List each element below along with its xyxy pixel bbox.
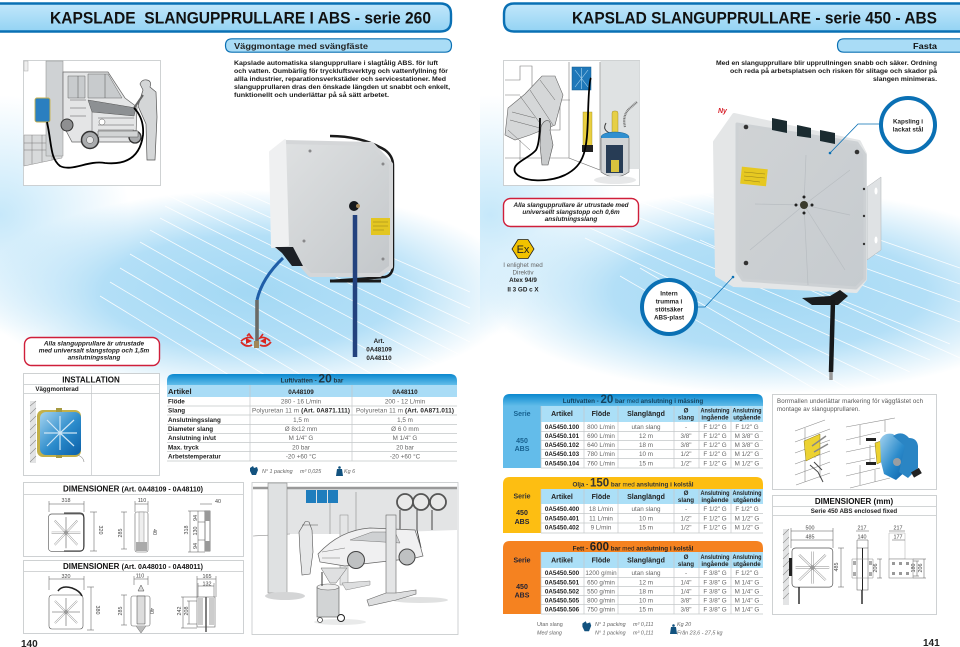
table: olja serie 450: 1/2" (680, 516, 692, 522)
table title: Luft/vatten - 20 bar med anslutning i mässing (563, 394, 703, 406)
table: luft/vatten serie 450: F 1/2" G (703, 433, 727, 440)
drawing: front view: 485 (834, 562, 840, 572)
table: luft/vatten serie 450: utan slang (631, 424, 661, 431)
table: luft/vatten serie 260: 0A48109 (288, 389, 314, 396)
table: fett serie 450: 750 g/min (587, 607, 615, 614)
table: olja serie 450: M 1/2" G (735, 524, 759, 532)
table title: Fett - 600 bar med anslutning i kolstål (573, 542, 694, 554)
drawing: front view: 320 (97, 526, 103, 534)
table: luft/vatten serie 450: 10 m (639, 451, 653, 458)
callout: intern trumma: Intern (660, 290, 678, 298)
table: olja serie 450: Slanglängd (627, 494, 665, 501)
text block: intro left: slangupprullaren dras den önskade längden ut snabbt och enkelt, (234, 84, 450, 91)
table: fett serie 450: 0A5450.505 (545, 598, 580, 604)
subheading: Fasta (838, 39, 960, 52)
table: fett serie 450: M 1/4" G (735, 588, 759, 595)
packing info: serie 450: Med slang (537, 630, 562, 636)
text block: intro left: allla industrier, reparationsverkstäder och servicestationer. Med (234, 76, 446, 83)
heading: DIMENSIONER (mm) (815, 497, 893, 506)
table: luft/vatten serie 450: F 1/2" G (703, 460, 727, 468)
table: olja serie 450: - (685, 506, 687, 513)
illustration: mechanic and jeep (24, 60, 160, 186)
drawing: side view (118, 574, 154, 633)
text block: intro right (716, 60, 937, 83)
table: luft/vatten serie 450: M 3/8" G (735, 433, 759, 440)
table: olja serie 450: F 1/2" G (703, 516, 727, 522)
icon: wall mounted reel (30, 401, 84, 463)
callout: intern trumma (642, 276, 734, 334)
drawing: reel mounted on bracket (846, 418, 922, 488)
callout: intern trumma: stötsäker (655, 306, 684, 314)
callout: intern trumma: ABS-plast (654, 314, 685, 322)
table: fett serie 450: 0A5450.506 (545, 607, 580, 614)
text block: Atex directive: Atex 94/9 (509, 277, 537, 284)
table: luft/vatten serie 450: 3/8" (680, 442, 692, 449)
table: luft/vatten serie 450: 780 L/min (587, 451, 615, 458)
callout: Kapsling i lackat stål: Kapsling i (893, 118, 923, 126)
table: luft/vatten serie 450: Slanglängd (627, 411, 665, 418)
table: luft/vatten serie 260: M 1/4" G (393, 435, 417, 442)
drawing: bracket view: 132 (202, 582, 212, 588)
table: fett serie 450: Artikel (551, 558, 573, 564)
table: fett serie 450: 1/4" (680, 588, 692, 595)
drawing: bracket view: 94 (193, 543, 199, 549)
table: luft/vatten serie 450: Anslutning (700, 408, 730, 414)
table: fett serie 450: 800 g/min (587, 598, 615, 604)
drawing: side view: 217 (858, 526, 866, 532)
text block: intro right: och reda på arbetsplatsen och risken för slitage och skador på (730, 67, 937, 75)
table: fett serie 450: F 3/8" G (703, 570, 727, 577)
panel: dimensioner 0A48010 (24, 560, 244, 634)
label: väggmonterad: Väggmonterad (35, 386, 79, 393)
table: luft/vatten serie 450: F 1/2" G (703, 451, 727, 458)
table: olja serie 450: Serie (513, 494, 531, 500)
table: fett serie 450: Anslutning (732, 554, 762, 561)
drawing: front view (49, 574, 100, 630)
title banner: left page: KAPSLADE SLANGUPPRULLARE I ABS - serie 260 (50, 10, 431, 28)
drawing: side view: 285 (118, 528, 124, 538)
drawing: bracket view: 208 (184, 606, 190, 616)
table: luft/vatten serie 260: 0A48110 (392, 389, 418, 396)
icon: Ex atex hexagon: Ex (517, 244, 530, 256)
table: luft/vatten serie 450: Anslutning (732, 408, 762, 414)
table: fett serie 450: M 1/4" G (735, 598, 759, 604)
table: luft/vatten serie 450: slang (678, 414, 694, 422)
table: luft/vatten serie 260: M 1/4" G (289, 435, 313, 442)
table: luft/vatten serie 450: F 1/2" G (703, 442, 727, 449)
illustration: workshop with car lift (252, 482, 458, 634)
table: fett serie 450: 0A5450.501 (545, 579, 580, 586)
table: luft/vatten serie 450: Serie (513, 411, 531, 418)
drawing: bracket view: 242 (177, 606, 183, 616)
table: luft/vatten serie 450: 0A5450.101 (545, 433, 580, 440)
callout: right hose stop note: Alla slangupprullare är utrustade med (512, 202, 630, 209)
table: fett serie 450: 12 m (639, 579, 653, 586)
table: luft/vatten serie 450 (503, 394, 763, 468)
table: olja serie 450: 9 L/min (591, 524, 612, 532)
subheading: Serie 450 ABS enclosed fixed (811, 508, 897, 515)
table: luft/vatten serie 450: 760 L/min (587, 460, 615, 468)
table: fett serie 450: 0A5450.500 (545, 570, 580, 577)
table: luft/vatten serie 450: 690 L/min (587, 433, 615, 440)
drawing: front view: 485 (806, 534, 814, 540)
drawing: front view: 320 (62, 574, 70, 580)
table: fett serie 450: - (685, 570, 687, 577)
text block: Atex directive: II 3 GD c X (507, 286, 539, 294)
drawing: bracket view (177, 574, 216, 632)
table: olja serie 450: 10 m (639, 516, 653, 522)
table: olja serie 450: 0A5450.402 (545, 524, 580, 532)
table: fett serie 450: F 3/8" G (703, 607, 727, 614)
table: luft/vatten serie 450: 15 m (639, 460, 653, 468)
table: fett serie 450: 1200 g/min (585, 570, 617, 577)
title banner: right page (504, 4, 960, 32)
table: fett serie 450: 3/8" (680, 598, 692, 604)
table: fett serie 450: 15 m (639, 607, 653, 614)
table: fett serie 450: 450 (516, 584, 528, 591)
background: left page blue glow with streaks (0, 60, 600, 410)
reel photo: serie 450 (715, 115, 881, 380)
table: luft/vatten serie 450: Flöde (592, 411, 610, 418)
drawing: side view (118, 498, 157, 552)
table: luft/vatten serie 260: 20 bar (292, 444, 310, 451)
table: fett serie 450: F 3/8" G (703, 598, 727, 604)
table: fett serie 450: utan slang (631, 570, 661, 577)
table: olja serie 450: 15 m (639, 524, 653, 532)
drawing: bracket view (889, 526, 926, 578)
heading: DIMENSIONER (Art. 0A48010 - 0A48011) (63, 562, 203, 571)
table: luft/vatten serie 450: 3/8" (680, 433, 692, 440)
label: article numbers: 0A48109 (366, 346, 392, 354)
table: luft/vatten serie 260 (167, 372, 457, 461)
table: olja serie 450: Anslutning (700, 490, 730, 497)
text block: intro right: Med en slangupprullare blir upprullningen snabb och säker. Ordning (716, 60, 937, 67)
table: luft/vatten serie 260: Slang (168, 408, 185, 414)
heading: installation: INSTALLATION (62, 376, 120, 384)
drawing: bracket view: 206 (918, 564, 924, 572)
table: fett serie 450: Serie (513, 558, 531, 564)
text block: intro left (234, 59, 450, 99)
drawing: bracket view: 180 (911, 564, 917, 572)
packing info: serie 260 (250, 466, 355, 476)
table: luft/vatten serie 450: 1/2" (680, 451, 692, 458)
icon: rotating swivel arrows (241, 334, 271, 348)
panel: installation (24, 374, 160, 476)
callout: right hose stop note: universellt slangstopp och 0,6m (522, 209, 620, 216)
callout: left hose stop note: Alla slangupprullare är utrustade (43, 340, 145, 348)
table: fett serie 450: F 3/8" G (703, 579, 727, 586)
table: luft/vatten serie 450: 1/2" (680, 460, 692, 468)
packing info: serie 450: Utan slang (537, 622, 563, 628)
table: luft/vatten serie 450: ingående (701, 414, 729, 422)
drawing: front view: 500 (806, 526, 814, 532)
table: luft/vatten serie 450: utgående (733, 414, 761, 422)
table: luft/vatten serie 450: - (685, 424, 687, 431)
drawing: bracket view: 217 (894, 526, 902, 532)
callout: left hose stop note (24, 338, 160, 366)
table: olja serie 450: utgående (733, 497, 761, 504)
table: fett serie 450: ingående (701, 561, 729, 568)
table: fett serie 450: Anslutning (700, 554, 730, 561)
drawing: side view (852, 526, 882, 604)
table: luft/vatten serie 260: Ø 8x12 mm (285, 426, 317, 433)
table: fett serie 450: Slanglängd (627, 558, 665, 564)
title banner: right page: KAPSLAD SLANGUPPRULLARE - serie 450 - ABS (572, 10, 937, 28)
packing info: serie 450: Kg 20 (677, 622, 691, 628)
text block: Atex directive: I enlighet med (503, 262, 543, 269)
table: luft/vatten serie 450: 0A5450.104 (545, 460, 580, 468)
drawing: side view: 206 (873, 564, 879, 572)
table: olja serie 450: 11 L/min (589, 516, 613, 522)
table: luft/vatten serie 450: M 3/8" G (735, 442, 759, 449)
table: olja serie 450: 1/2" (680, 524, 692, 532)
label: article numbers: Art. (374, 338, 385, 345)
panel: dimensioner serie 450 (772, 496, 936, 614)
table: luft/vatten serie 260: Ø 6 0 mm (391, 426, 419, 433)
table: luft/vatten serie 450: M 1/2" G (735, 460, 759, 468)
packing info: serie 450: m³ 0,111 (633, 630, 653, 636)
table: fett serie 450: M 1/4" G (735, 607, 759, 614)
table: luft/vatten serie 260: Flöde (168, 398, 185, 405)
drawing: front view (48, 498, 103, 551)
table: fett serie 450: 3/8" (680, 607, 692, 614)
label: article numbers: 0A48110 (366, 355, 392, 362)
table: luft/vatten serie 260: Diameter slang (168, 426, 213, 433)
table: olja serie 450: 18 L/min (589, 506, 614, 513)
drawing: bracket view: 130 (193, 526, 199, 536)
text block: intro right: slangen minimeras. (873, 76, 937, 83)
table: luft/vatten serie 450: ABS (515, 446, 530, 453)
drawing: front view: 318 (62, 498, 70, 504)
table: luft/vatten serie 450: 0A5450.100 (545, 424, 580, 431)
table: fett serie 450: slang (678, 561, 694, 568)
table: luft/vatten serie 450: M 1/2" G (735, 451, 759, 458)
table: luft/vatten serie 260: -20 +60 °C (390, 452, 421, 460)
table: fett serie 450: M 1/4" G (735, 579, 759, 586)
table: olja serie 450 (503, 477, 763, 533)
drawing: side view: 140 (858, 534, 866, 540)
table: luft/vatten serie 260: 1,5 m (397, 417, 413, 424)
table: olja serie 450: F 1/2" G (703, 506, 727, 513)
table: fett serie 450: Ø (684, 554, 689, 561)
table: olja serie 450: Flöde (592, 494, 610, 501)
table: luft/vatten serie 260: Polyuretan 11 m (Art. 0A871.111) (252, 408, 350, 414)
table: fett serie 450: 1/4" (680, 579, 692, 586)
drawing: side view: 110 (136, 574, 144, 580)
table: fett serie 450: 10 m (639, 598, 653, 604)
callout: intern trumma: trumma i (656, 298, 683, 306)
subheading: Väggmontage med svängfäste (226, 39, 452, 52)
callout: left hose stop note: med universalt slangstopp och 1,5m (39, 348, 150, 354)
text block: intro left: Kapslade automatiska slangupprullare i slagtålig ABS. för luft (234, 59, 439, 67)
panel: borrmall: montage av slangupprullaren. (777, 406, 860, 413)
drawing: brick wall with drill template (795, 420, 830, 485)
text block: Atex directive: Direktiv (512, 270, 534, 276)
reel photo: art. 0A48109 (257, 136, 393, 357)
table: fett serie 450: 550 g/min (587, 588, 615, 595)
table: fett serie 450: 650 g/min (587, 579, 615, 586)
table: luft/vatten serie 260: 20 bar (396, 444, 414, 451)
table: fett serie 450: 18 m (639, 588, 653, 595)
drawing: bracket view: 40 (215, 499, 221, 505)
table title: Olja - 150 bar med anslutning i kolstål (572, 478, 694, 490)
label: Ny: Ny (718, 108, 728, 115)
table: luft/vatten serie 450: Ø (684, 408, 689, 414)
drawing: side view: 110 (138, 498, 146, 504)
packing info: serie 450 (537, 621, 723, 636)
drawing: side view: 40 (151, 529, 157, 535)
packing info: serie 260: N° 1 packing (262, 469, 293, 475)
table: luft/vatten serie 260: Anslutning in/ut (168, 435, 217, 442)
table: luft/vatten serie 450: F 1/2" G (735, 424, 759, 431)
table: luft/vatten serie 260: 280 - 16 L/min (281, 398, 322, 405)
label: article numbers (366, 338, 392, 362)
subheading: Fasta: Fasta (913, 41, 937, 51)
icon: Ex atex hexagon (512, 240, 534, 258)
heading: DIMENSIONER (Art. 0A48109 - 0A48110) (63, 484, 203, 494)
table: olja serie 450: Ø (684, 490, 689, 497)
table: luft/vatten serie 450: 18 m (639, 442, 653, 449)
table: luft/vatten serie 260: Polyuretan 11 m (Art. 0A871.011) (356, 408, 454, 414)
table: luft/vatten serie 450: 12 m (639, 433, 653, 440)
text block: Atex directive (503, 262, 543, 294)
table: luft/vatten serie 260: Max. tryck (168, 444, 199, 451)
illustration: grease pump installation (504, 60, 640, 186)
packing info: serie 450: m³ 0,111 (633, 622, 653, 628)
text block: intro left: funktionellt och underlättar på så sätt arbetet. (234, 91, 389, 99)
callout: right hose stop note (504, 198, 638, 226)
table: olja serie 450: Anslutning (732, 490, 762, 497)
table: luft/vatten serie 450: 450 (516, 438, 528, 445)
table: olja serie 450: F 1/2" G (735, 506, 759, 513)
drawing: front view (783, 526, 844, 605)
table: luft/vatten serie 450: 0A5450.103 (545, 451, 580, 458)
callout: Kapsling i lackat stål (829, 98, 935, 154)
table: olja serie 450: utan slang (631, 506, 661, 513)
packing info: serie 260: Kg 6 (344, 469, 355, 475)
packing info: serie 450: N° 1 packing (595, 630, 626, 636)
text block: intro left: och vatten. Oumbärlig för tryckluftsverktyg och vattenfyllning för (234, 68, 448, 75)
table: luft/vatten serie 260: -20 +60 °C (286, 452, 317, 460)
table: olja serie 450: Artikel (551, 494, 573, 501)
panel: borrmall (772, 394, 936, 490)
table: olja serie 450: 0A5450.400 (545, 506, 580, 513)
drawing: bracket view (184, 499, 221, 552)
table: luft/vatten serie 260: 200 - 12 L/min (385, 398, 426, 405)
table: luft/vatten serie 450: 640 L/min (587, 442, 615, 449)
table: fett serie 450: ABS (515, 592, 530, 600)
packing info: serie 450: N° 1 packing (595, 622, 626, 628)
table: olja serie 450: 450 (516, 510, 528, 517)
table: olja serie 450: 0A5450.401 (545, 516, 580, 522)
background: right page blue glow with streaks (480, 60, 960, 410)
table: fett serie 450: utgående (733, 561, 761, 568)
table: luft/vatten serie 260: Artikel (168, 387, 192, 396)
packing info: serie 450: Från 23,6 - 27,5 kg (677, 630, 723, 636)
table title: Luft/vatten - 20 bar (281, 372, 344, 386)
drawing: side view: 285 (118, 606, 124, 616)
table: olja serie 450: M 1/2" G (735, 516, 759, 522)
subheading: Väggmontage med svängfäste: Väggmontage med svängfäste (234, 41, 368, 51)
table: fett serie 450: Flöde (592, 558, 610, 564)
table: luft/vatten serie 450: 800 L/min (587, 424, 615, 431)
table: olja serie 450: F 1/2" G (703, 524, 727, 532)
table: luft/vatten serie 260: Arbetstemperatur (168, 454, 221, 460)
table: luft/vatten serie 260: 1,5 m (293, 417, 309, 424)
callout: left hose stop note: anslutningsslang (68, 354, 120, 362)
text block: borrmall: Borrmallen underlättar markering för väggfästet och (777, 398, 923, 405)
callout: Kapsling i lackat stål: lackat stål (893, 126, 923, 134)
table: olja serie 450: ABS (515, 519, 530, 526)
drawing: bracket view: 177 (894, 534, 902, 540)
table: fett serie 450: 0A5450.502 (545, 588, 580, 595)
table: olja serie 450: slang (678, 497, 694, 504)
drawing: bracket view: 165 (202, 574, 212, 580)
table: fett serie 450 (503, 541, 763, 614)
table: luft/vatten serie 450: 0A5450.102 (545, 442, 580, 449)
drawing: front view: 380 (94, 606, 100, 614)
table: fett serie 450: F 1/2" G (735, 570, 759, 577)
table: olja serie 450: ingående (701, 497, 729, 504)
table: fett serie 450: F 3/8" G (703, 588, 727, 595)
callout: right hose stop note: anslutningsslang (545, 216, 597, 223)
table: luft/vatten serie 450: F 1/2" G (703, 424, 727, 431)
drawing: bracket view: 318 (184, 526, 190, 534)
drawing: bracket view: 94 (193, 515, 199, 521)
packing info: serie 260: m³ 0,025 (300, 469, 322, 475)
drawing: side view: 40 (148, 608, 154, 614)
table: luft/vatten serie 260: Anslutningsslang (168, 417, 221, 424)
table: luft/vatten serie 450: Artikel (551, 411, 573, 418)
panel: dimensioner 0A48109 (24, 482, 244, 556)
title banner: left page (0, 4, 451, 32)
